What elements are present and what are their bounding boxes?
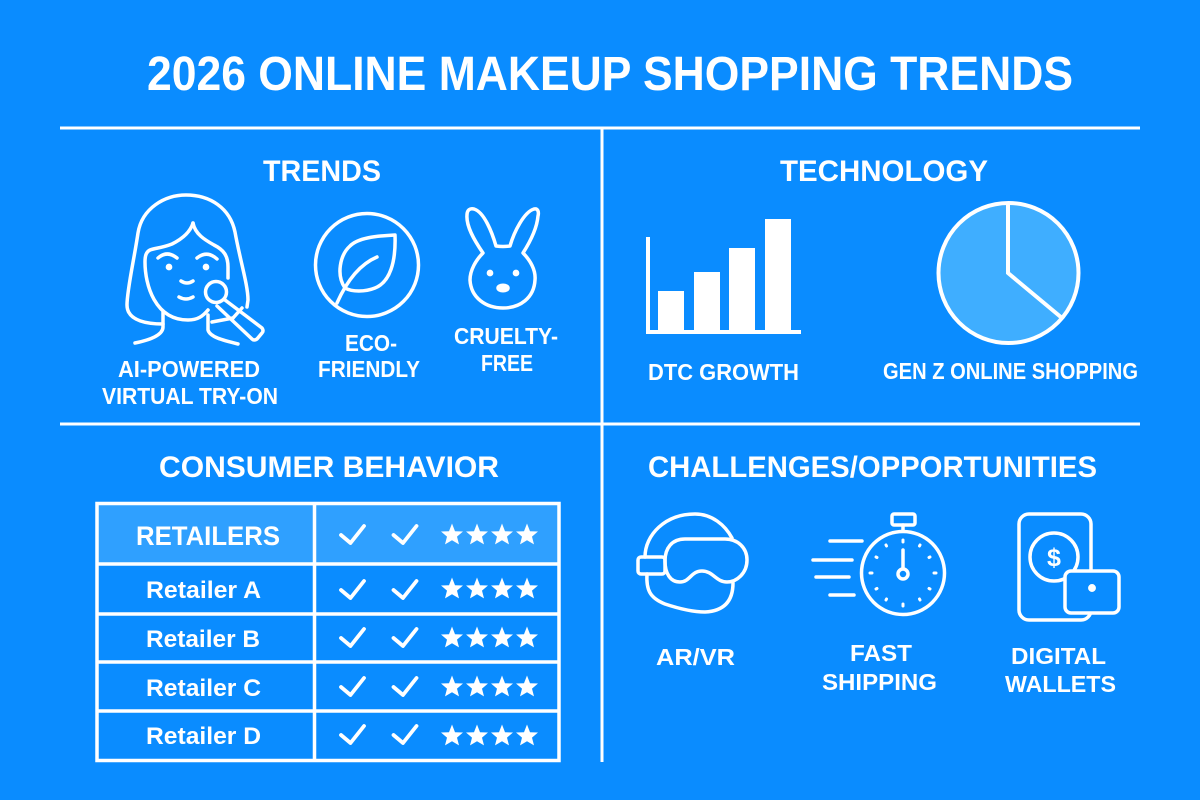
- label: fast shipping: FAST: [850, 640, 912, 666]
- table: retailers: [97, 503, 559, 761]
- label: digital wallets: DIGITAL: [1011, 643, 1106, 669]
- heading: challenges/opportunities: CHALLENGES/OPPORTUNITIES: [648, 451, 1097, 484]
- pie chart: gen z online shopping: [938, 203, 1078, 343]
- heading: consumer behavior: CONSUMER BEHAVIOR: [159, 451, 499, 484]
- label: dtc growth: DTC GROWTH: [648, 359, 799, 385]
- label: ai-powered virtual try-on: VIRTUAL TRY-ON: [102, 383, 278, 409]
- icon: rabbit: [467, 209, 538, 308]
- label: digital wallets: WALLETS: [1005, 671, 1116, 697]
- row: retailer d: Retailer D: [146, 723, 261, 750]
- label: eco-friendly: [318, 330, 420, 382]
- label: ar/vr: AR/VR: [656, 644, 735, 670]
- icon: woman with makeup brush: [127, 195, 263, 344]
- table header: RETAILERS: [136, 521, 280, 551]
- label: ai-powered virtual try-on: AI-POWERED: [118, 356, 260, 382]
- label: digital wallets: [1005, 643, 1116, 697]
- label: fast shipping: SHIPPING: [822, 669, 937, 695]
- panel: technology: [648, 155, 1138, 385]
- heading: technology: TECHNOLOGY: [780, 155, 988, 188]
- row: retailer c: Retailer C: [146, 675, 261, 702]
- row: retailer d: [146, 723, 538, 750]
- panel: trends: [102, 155, 558, 409]
- title: 2026 ONLINE MAKEUP SHOPPING TRENDS: [147, 48, 1073, 101]
- row: retailer b: Retailer B: [146, 626, 260, 653]
- row: retailer a: Retailer A: [146, 577, 261, 604]
- label: ai-powered virtual try-on: [102, 356, 278, 409]
- label: eco-friendly: ECO-: [345, 330, 397, 356]
- row: retailer a: [146, 577, 538, 604]
- icon: leaf in circle: [316, 214, 418, 316]
- icon: stopwatch with speed lines: [813, 514, 944, 614]
- label: cruelty-free: FREE: [481, 350, 533, 376]
- panel: consumer behavior: [97, 451, 559, 761]
- label: eco-friendly: FRIENDLY: [318, 356, 420, 382]
- label: cruelty-free: CRUELTY-: [454, 323, 558, 349]
- icon: digital wallet phone: [1019, 514, 1119, 620]
- row: retailer c: [146, 675, 538, 702]
- label: fast shipping: [822, 640, 937, 695]
- label: gen z online shopping: GEN Z ONLINE SHOPPING: [883, 358, 1138, 384]
- label: cruelty-free: [454, 323, 558, 376]
- heading: trends: TRENDS: [263, 155, 381, 188]
- row: retailer b: [146, 626, 538, 653]
- icon: digital wallet phone: $: [1047, 544, 1061, 572]
- bar chart: dtc growth: [648, 219, 801, 332]
- panel: challenges and opportunities: [638, 451, 1119, 697]
- table header: [136, 521, 538, 551]
- icon: ar/vr headset: [638, 514, 747, 612]
